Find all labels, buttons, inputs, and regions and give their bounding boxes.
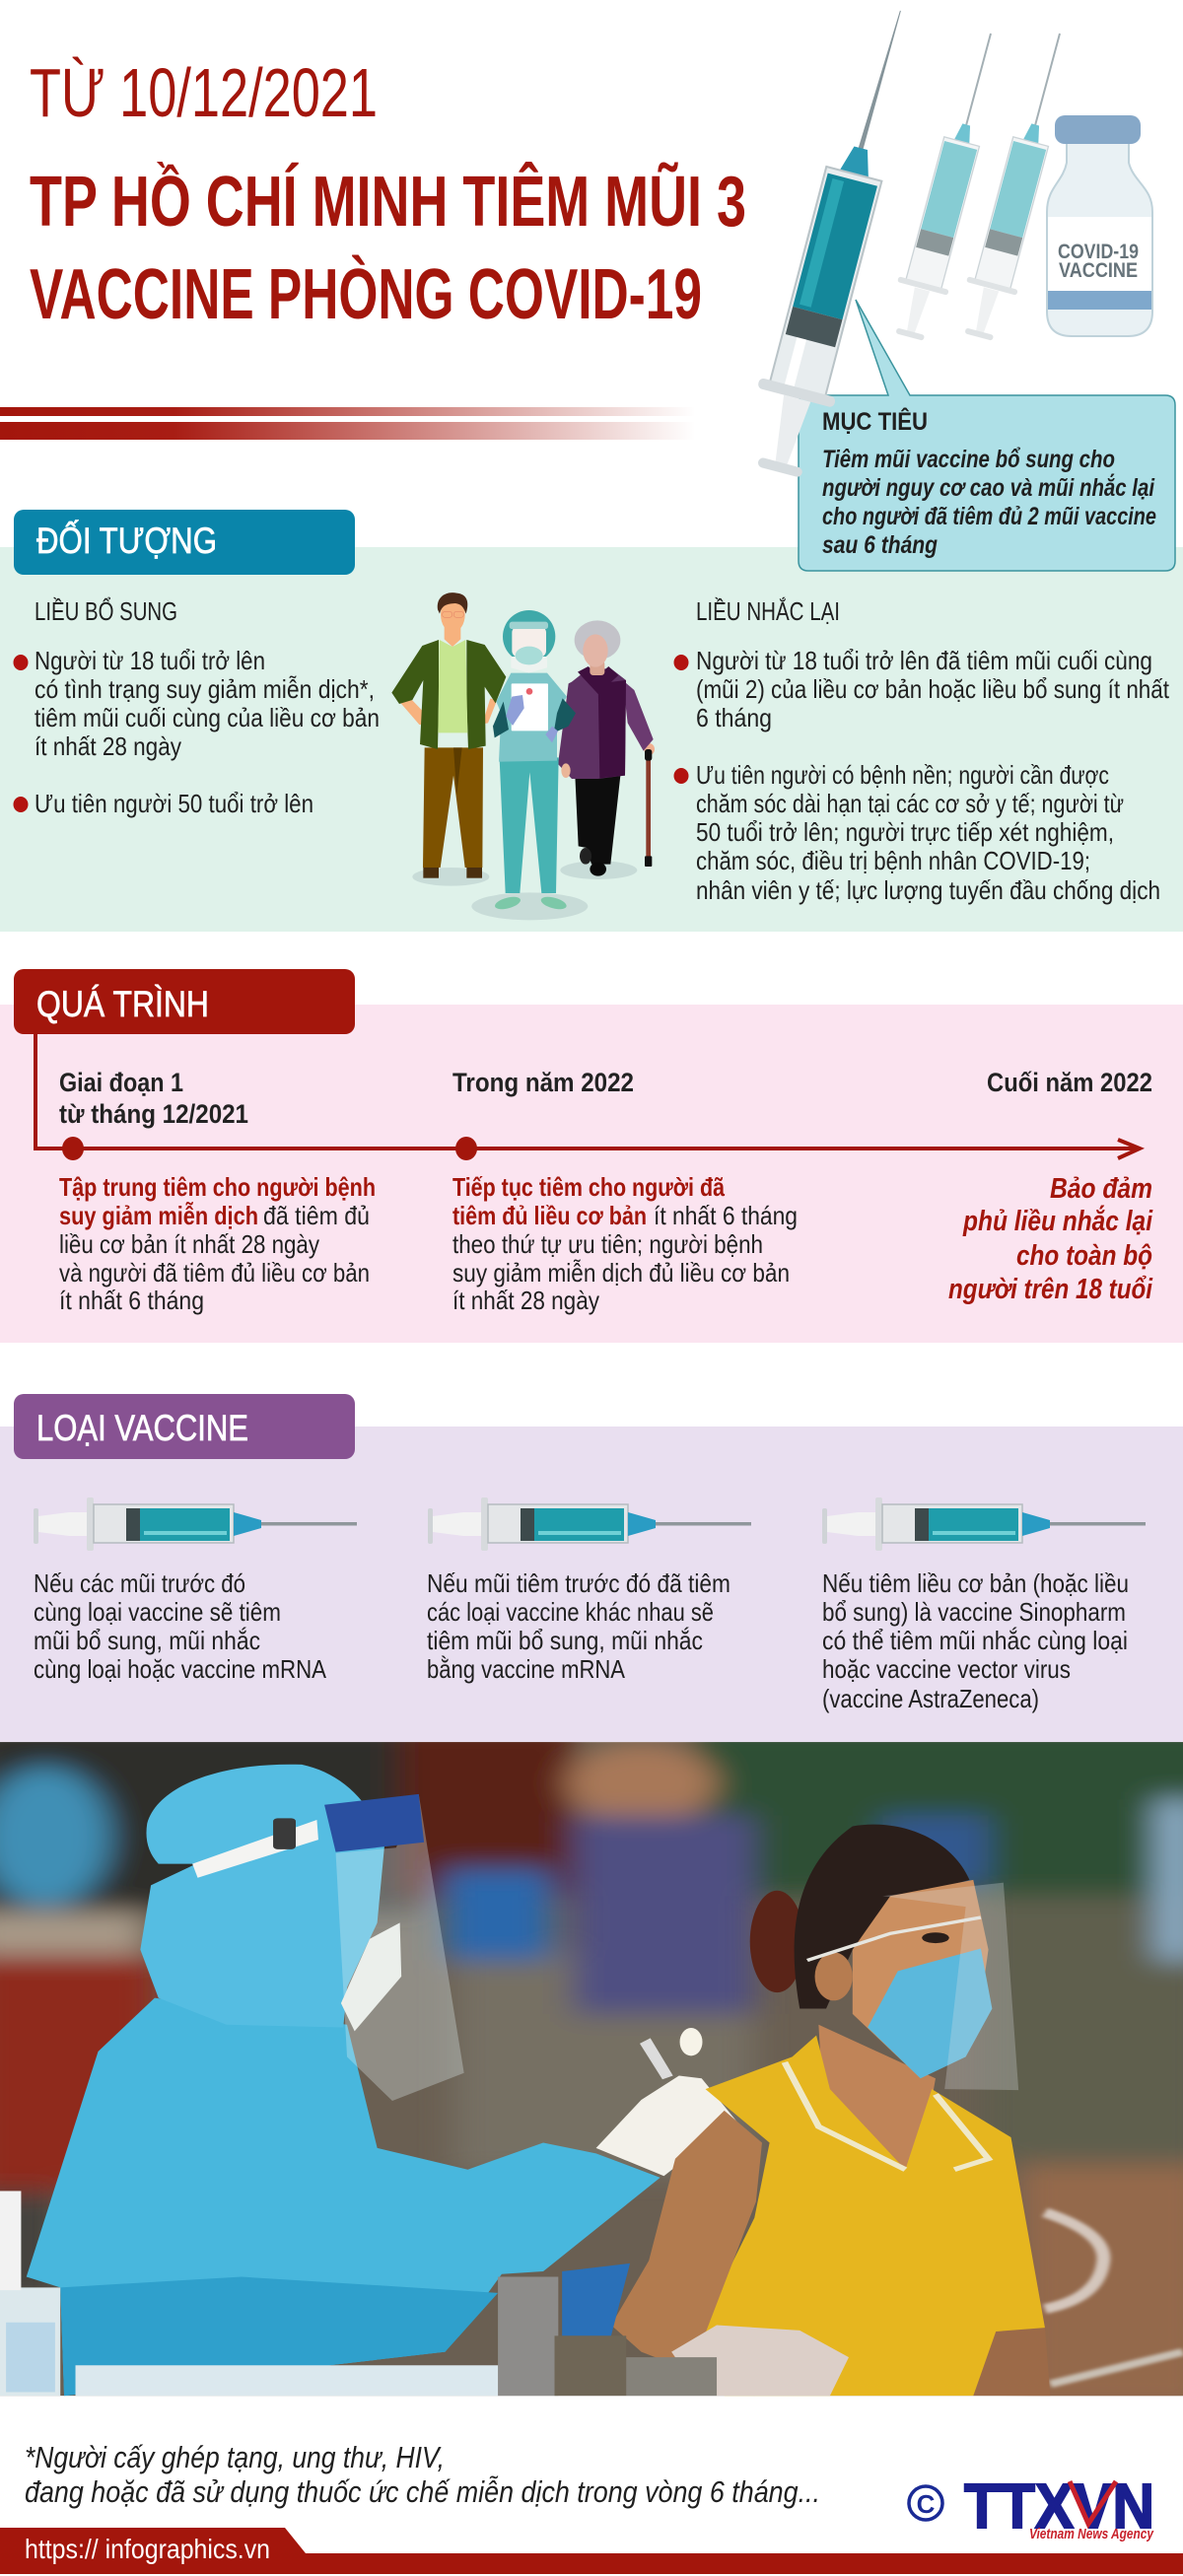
text: giai đoạn 1: [59, 1068, 376, 1315]
icon: vaccine vial: [1047, 115, 1152, 336]
heading: đối tượng: [14, 510, 355, 575]
text: giai đoạn 1: từ tháng 12/2021: [59, 1099, 248, 1129]
callout: mục tiêu: sau 6 tháng: [822, 531, 938, 559]
text: liều nhắc lại: 6 tháng: [696, 703, 772, 732]
text: liều bổ sung: tiêm mũi cuối cùng của liều cơ bản: [35, 703, 380, 732]
panel: quá trình: [0, 969, 1183, 1343]
text: liều bổ sung: [14, 596, 380, 818]
text: giai đoạn 1: Tập trung tiêm cho người bệnh: [59, 1172, 376, 1202]
footnote: đang hoặc đã sử dụng thuốc ức chế miễn dịch trong vòng 6 tháng...: [25, 2474, 820, 2509]
text: vaccine column 3: có thể tiêm mũi nhắc cùng loại: [822, 1626, 1128, 1655]
table items: [0, 2191, 717, 2398]
text: giai đoạn 1: liều cơ bản ít nhất 28 ngày: [59, 1229, 319, 1259]
text: liều bổ sung: Ưu tiên người 50 tuổi trở lên: [35, 789, 313, 818]
text: trong năm 2022: suy giảm miễn dịch đủ liều cơ bản: [452, 1258, 790, 1288]
footnote: [25, 2440, 820, 2509]
text: liều nhắc lại: chăm sóc, điều trị bệnh nhân COVID-19;: [696, 846, 1090, 875]
text: liều nhắc lại: LIỀU NHẮC LẠI: [696, 596, 840, 626]
text: vaccine column 3: hoặc vaccine vector virus: [822, 1654, 1071, 1684]
text: trong năm 2022: Trong năm 2022: [452, 1068, 634, 1097]
icon: large syringe: [737, 0, 936, 481]
text: vaccine column 3: (vaccine AstraZeneca): [822, 1684, 1039, 1713]
text: liều nhắc lại: [674, 596, 1170, 905]
heading: loại vaccine: LOẠI VACCINE: [36, 1408, 248, 1448]
text: cuối năm 2022: cho toàn bộ: [1016, 1240, 1152, 1272]
heading: đối tượng: ĐỐI TƯỢNG: [36, 520, 217, 561]
text: giai đoạn 1: ít nhất 6 tháng: [59, 1286, 204, 1315]
text: vaccine column 3: [822, 1568, 1129, 1713]
floor marking: [1045, 2212, 1103, 2309]
decorative red stripes: [0, 407, 695, 440]
vaccinated woman: [611, 1825, 1050, 2396]
icon: small syringe 1: [884, 27, 1016, 344]
text: trong năm 2022: [452, 1068, 798, 1315]
logo: TTXVN: C: [917, 2489, 936, 2519]
icon: vaccine vial: VACCINE: [1059, 259, 1138, 282]
heading: quá trình: [14, 969, 355, 1034]
callout: mục tiêu: Tiêm mũi vaccine bổ sung cho: [822, 446, 1115, 473]
text: trong năm 2022: ít nhất 28 ngày: [452, 1286, 599, 1315]
text: vaccine column 1: mũi bổ sung, mũi nhắc: [34, 1626, 260, 1655]
nurse in protective gown: [27, 1765, 743, 2396]
icon: syringe 3: [822, 1497, 1146, 1551]
logo: TTXVN: TTXVN: [964, 2471, 1154, 2541]
text: liều nhắc lại: 50 tuổi trở lên; người trực tiếp xét nghiệm,: [696, 817, 1114, 847]
text: liều bổ sung: Người từ 18 tuổi trở lên: [35, 646, 265, 675]
icon: vaccine vial: COVID-19: [1058, 241, 1139, 263]
footnote: *Người cấy ghép tạng, ung thư, HIV,: [25, 2440, 445, 2474]
text: vaccine column 2: bằng vaccine mRNA: [427, 1654, 626, 1684]
text: vaccine column 2: tiêm mũi bổ sung, mũi nhắc: [427, 1626, 703, 1655]
text: giai đoạn 1: đã tiêm đủ: [263, 1201, 370, 1230]
text: vaccine column 2: Nếu mũi tiêm trước đó đã tiêm: [427, 1568, 731, 1598]
text: vaccine column 1: cùng loại hoặc vaccine mRNA: [34, 1654, 327, 1684]
text: trong năm 2022: Tiếp tục tiêm cho người đã: [452, 1172, 725, 1202]
title: TP HỒ CHÍ MINH TIÊM MŨI 3: [30, 162, 746, 242]
figure: nurse: [471, 610, 588, 920]
illustration: three people: [391, 592, 655, 920]
text: trong năm 2022: ít nhất 6 tháng: [654, 1201, 798, 1230]
text: vaccine column 1: cùng loại vaccine sẽ tiêm: [34, 1597, 281, 1627]
callout: mục tiêu: [799, 300, 1175, 571]
text: liều bổ sung: LIỀU BỔ SUNG: [35, 596, 177, 626]
text: cuối năm 2022: Bảo đảm: [1050, 1173, 1152, 1205]
text: cuối năm 2022: [948, 1068, 1153, 1305]
logo: TTXVN: Vietnam News Agency: [1029, 2526, 1154, 2542]
text: trong năm 2022: tiêm đủ liều cơ bản: [452, 1201, 647, 1230]
text: liều bổ sung: ít nhất 28 ngày: [35, 731, 181, 761]
icon: syringe 1: [34, 1497, 357, 1551]
callout: mục tiêu: MỤC TIÊU: [822, 406, 928, 436]
panel: đối tượng: [0, 510, 1183, 932]
text: liều bổ sung: có tình trạng suy giảm miễn dịch*,: [35, 674, 375, 704]
title: VACCINE PHÒNG COVID-19: [30, 254, 702, 334]
text: vaccine column 1: [34, 1568, 327, 1684]
heading: loại vaccine: [14, 1394, 355, 1459]
text: cuối năm 2022: Cuối năm 2022: [987, 1068, 1152, 1097]
title: TỪ 10/12/2021: [30, 54, 378, 131]
footer bar: [0, 2528, 1183, 2574]
text: vaccine column 1: Nếu các mũi trước đó: [34, 1568, 245, 1598]
icon: small syringe 2: [953, 27, 1085, 344]
panel: loại vaccine: [0, 1394, 1183, 1742]
text: giai đoạn 1: suy giảm miễn dịch: [59, 1201, 258, 1230]
blurred background: [0, 1724, 1183, 2411]
icon: syringe 2: [428, 1497, 751, 1551]
timeline arrow: [35, 1034, 1140, 1160]
figure: elderly woman: [558, 620, 655, 879]
text: vaccine column 3: bổ sung) là vaccine Sinopharm: [822, 1597, 1126, 1627]
footer bar: https:// infographics.vn: [25, 2534, 270, 2564]
figure: man: [391, 592, 506, 886]
text: trong năm 2022: theo thứ tự ưu tiên; người bệnh: [452, 1229, 763, 1259]
text: vaccine column 3: Nếu tiêm liều cơ bản (hoặc liều: [822, 1568, 1129, 1598]
text: vaccine column 2: các loại vaccine khác nhau sẽ: [427, 1597, 714, 1627]
text: vaccine column 2: [427, 1568, 731, 1684]
photo: vaccination scene: [0, 1724, 1183, 2411]
title: [30, 54, 746, 334]
heading: quá trình: QUÁ TRÌNH: [36, 984, 209, 1024]
text: giai đoạn 1: và người đã tiêm đủ liều cơ bản: [59, 1258, 370, 1288]
text: cuối năm 2022: phủ liều nhắc lại: [962, 1204, 1153, 1237]
text: giai đoạn 1: Giai đoạn 1: [59, 1068, 183, 1097]
